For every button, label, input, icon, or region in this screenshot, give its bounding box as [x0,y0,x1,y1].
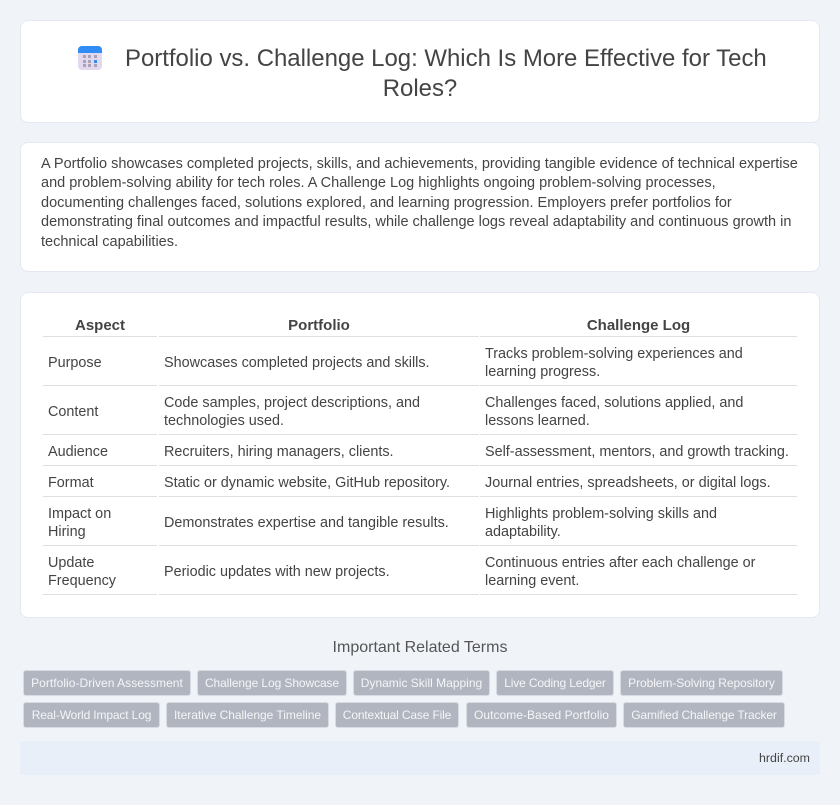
challenge log impact [485,506,717,540]
tag: Live Coding Ledger [504,676,606,690]
tag: Iterative Challenge Timeline [174,708,321,722]
portfolio update: Periodic updates with new projects. [164,564,390,580]
portfolio purpose: Showcases completed projects and skills. [164,355,430,371]
row: update frequency [48,555,116,589]
challenge log content [485,395,743,429]
tag: Challenge Log Showcase [205,676,339,690]
tag [23,702,160,728]
title: Portfolio vs. Challenge Log: Which Is More Effective for Tech [125,45,767,72]
challenge log impact: adaptability. [485,524,561,540]
tag: Portfolio-Driven Assessment [31,676,183,690]
challenge log purpose [485,346,743,380]
tag [166,702,329,728]
tag [620,670,783,696]
tag [466,702,617,728]
portfolio content: technologies used. [164,413,284,429]
summary text [41,156,798,250]
tag: Contextual Case File [343,708,451,722]
table header: challenge log: Challenge Log [587,317,690,334]
tag: Dynamic Skill Mapping [361,676,482,690]
footer bar [20,741,820,775]
portfolio format: Static or dynamic website, GitHub repository. [164,475,450,491]
tags [23,670,785,728]
row: update frequency: Update [48,555,94,571]
tag: Problem-Solving Repository [628,676,775,690]
summary text: documenting challenges faced, solutions explored, and learning progression. Employers prefer portfolios for [41,195,732,211]
panel: comparison table [20,292,820,618]
row: update frequency: Frequency [48,573,116,589]
title: Roles? [383,75,457,102]
tag [353,670,490,696]
summary text: demonstrating final outcomes and impactful results, while challenge logs reveal adaptability and continuous growth in [41,214,791,230]
tag [335,702,459,728]
row: format: Format [48,475,94,491]
row: impact on hiring [48,506,111,540]
challenge log format: Journal entries, spreadsheets, or digital logs. [485,475,771,491]
row: purpose: Purpose [48,355,102,371]
row: impact on hiring: Impact on [48,506,111,522]
challenge log impact: Highlights problem-solving skills and [485,506,717,522]
tag: Gamified Challenge Tracker [631,708,777,722]
challenge log purpose: Tracks problem-solving experiences and [485,346,743,362]
challenge log purpose: learning progress. [485,364,600,380]
tag: Real-World Impact Log [32,708,151,722]
heading: related terms: Important Related Terms [333,639,507,656]
portfolio audience: Recruiters, hiring managers, clients. [164,444,394,460]
tag [197,670,347,696]
row: audience: Audience [48,444,108,460]
icon: calendar [78,46,102,70]
challenge log update [485,555,756,589]
title [125,45,767,102]
challenge log content: lessons learned. [485,413,590,429]
portfolio impact: Demonstrates expertise and tangible results. [164,515,449,531]
summary text: and problem-solving ability for tech roles. A Challenge Log highlights ongoing problem-solving processes, [41,175,716,191]
row: content: Content [48,404,98,420]
challenge log content: Challenges faced, solutions applied, and [485,395,743,411]
challenge log audience: Self-assessment, mentors, and growth tracking. [485,444,789,460]
summary text: A Portfolio showcases completed projects, skills, and achievements, providing tangible evidence of technical expertise [41,156,798,172]
tag [496,670,614,696]
summary text: technical capabilities. [41,234,178,250]
row: impact on hiring: Hiring [48,524,86,540]
tag [23,670,191,696]
challenge log update: Continuous entries after each challenge or [485,555,755,571]
challenge log update: learning event. [485,573,579,589]
panel: summary [20,142,820,272]
portfolio content [164,395,420,429]
footer site name: hrdif.com [759,751,810,765]
table header: portfolio: Portfolio [288,317,350,334]
tag [623,702,785,728]
table header: aspect: Aspect [75,317,125,334]
panel: title header [20,20,820,123]
portfolio content: Code samples, project descriptions, and [164,395,420,411]
tag: Outcome-Based Portfolio [474,708,609,722]
